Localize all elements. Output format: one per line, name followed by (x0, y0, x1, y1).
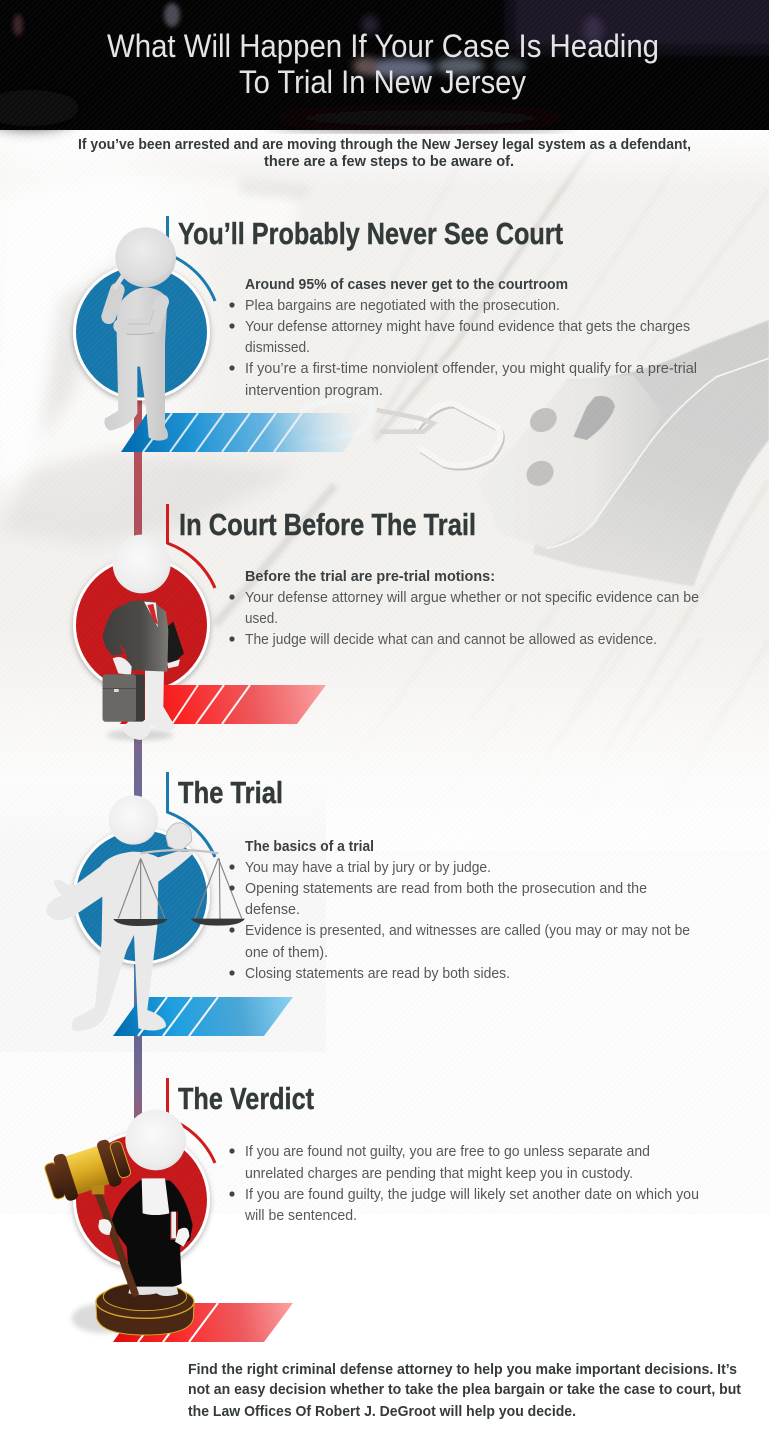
handcuff chain (300, 400, 502, 468)
section 2 text: used. (245, 610, 278, 627)
thinking person figure (104, 227, 176, 441)
section 2 text: The judge will decide what can and cannot be allowed as evidence. (245, 631, 657, 648)
gavel head (42, 1135, 133, 1205)
banner heading: To Trial In New Jersey (239, 64, 526, 100)
section 4 text (229, 1143, 699, 1224)
hand and knot (166, 823, 192, 852)
judge with gavel figure (42, 1110, 194, 1335)
wooden base (96, 1303, 194, 1335)
section 3 text (229, 838, 690, 982)
section 3 text: Closing statements are read by both sides. (245, 965, 510, 982)
section 1 text: intervention program. (245, 382, 383, 399)
section 4: The Verdict (42, 1078, 314, 1342)
hand (113, 657, 132, 675)
left handcuff (0, 120, 310, 545)
suit (103, 601, 168, 672)
heading: You’ll Probably Never See Court (178, 216, 563, 251)
circle badge (73, 264, 210, 400)
legs (123, 670, 176, 740)
striped bar (121, 413, 370, 452)
striped bar (113, 1303, 293, 1342)
intro text: there are a few steps to be aware of. (264, 153, 514, 170)
section 2 text: Your defense attorney will argue whether or not specific evidence can be (245, 589, 699, 606)
bracket and arc (167, 772, 215, 857)
section 1: You'll Probably Never See Court (73, 216, 563, 452)
bracket and arc (167, 216, 215, 301)
striped bar (120, 685, 326, 724)
top fade (0, 130, 769, 190)
section 1 text: Plea bargains are negotiated with the prosecution. (245, 297, 560, 314)
person with scales figure (46, 795, 245, 1031)
gavel handle (98, 1193, 135, 1293)
section 1 text: dismissed. (245, 339, 310, 356)
section 3 text: one of them). (245, 944, 328, 961)
section 3 text: Evidence is presented, and witnesses are called (you may or may not be (245, 922, 690, 939)
section 3 text: Opening statements are read from both the prosecution and the (245, 880, 647, 897)
bracket and arc (167, 504, 215, 588)
banner heading: What Will Happen If Your Case Is Heading (107, 28, 659, 64)
intro text (78, 136, 691, 170)
book (170, 1212, 178, 1240)
section 1 text: If you’re a first-time nonviolent offender, you might qualify for a pre-trial (245, 360, 697, 377)
striped bar (113, 997, 293, 1036)
scale balance (118, 850, 242, 922)
section 1 text (229, 276, 697, 399)
bracket and arc (167, 1078, 215, 1163)
closing call to action: Find the right criminal defense attorney to help you make important decisions. It’s (188, 1361, 737, 1378)
handcuff keyhole and rivets (573, 396, 615, 440)
businessman figure (103, 535, 184, 740)
circle badge (73, 556, 210, 694)
section 4 text: If you are found guilty, the judge will likely set another date on which you (245, 1186, 699, 1203)
handcuff band (533, 320, 769, 587)
circle badge (73, 1132, 210, 1268)
section 4 text: unrelated charges are pending that might keep you in custody. (245, 1165, 633, 1182)
closing call to action: the Law Offices Of Robert J. DeGroot will help you decide. (188, 1403, 576, 1420)
section 1 text: Around 95% of cases never get to the courtroom (245, 276, 568, 293)
handcuff plate (477, 375, 663, 548)
closing call to action (188, 1361, 741, 1420)
section 3 text: defense. (245, 901, 300, 918)
section 1 text: Your defense attorney might have found evidence that gets the charges (245, 318, 690, 335)
section 3 text: You may have a trial by jury or by judge. (245, 859, 491, 876)
timeline connector (134, 400, 142, 1140)
robe (111, 1178, 193, 1288)
banner heading (107, 28, 659, 100)
heading: The Verdict (178, 1081, 314, 1116)
section 4 text: If you are found not guilty, you are free to go unless separate and (245, 1143, 650, 1160)
section 2 text (229, 568, 699, 648)
title banner (0, 0, 769, 130)
folder (165, 622, 184, 665)
heading: In Court Before The Trail (179, 507, 476, 542)
briefcase (103, 674, 145, 722)
section 3 text: The basics of a trial (245, 838, 374, 855)
background: wood planks and handcuffs (0, 120, 769, 830)
section 2: In Court Before The Trail (73, 504, 476, 740)
circle badge (73, 828, 210, 964)
banner blurred city lights (0, 0, 769, 126)
section 2 text: Before the trial are pre-trial motions: (245, 568, 495, 585)
section 4 text: will be sentenced. (244, 1207, 357, 1224)
heading: The Trial (178, 775, 283, 810)
scale pans (113, 919, 167, 926)
intro text: If you’ve been arrested and are moving through the New Jersey legal system as a defendant, (78, 136, 691, 153)
section 3: The Trial (46, 772, 293, 1036)
closing call to action: not an easy decision whether to take the plea bargain or take the case to court, but (188, 1381, 741, 1398)
